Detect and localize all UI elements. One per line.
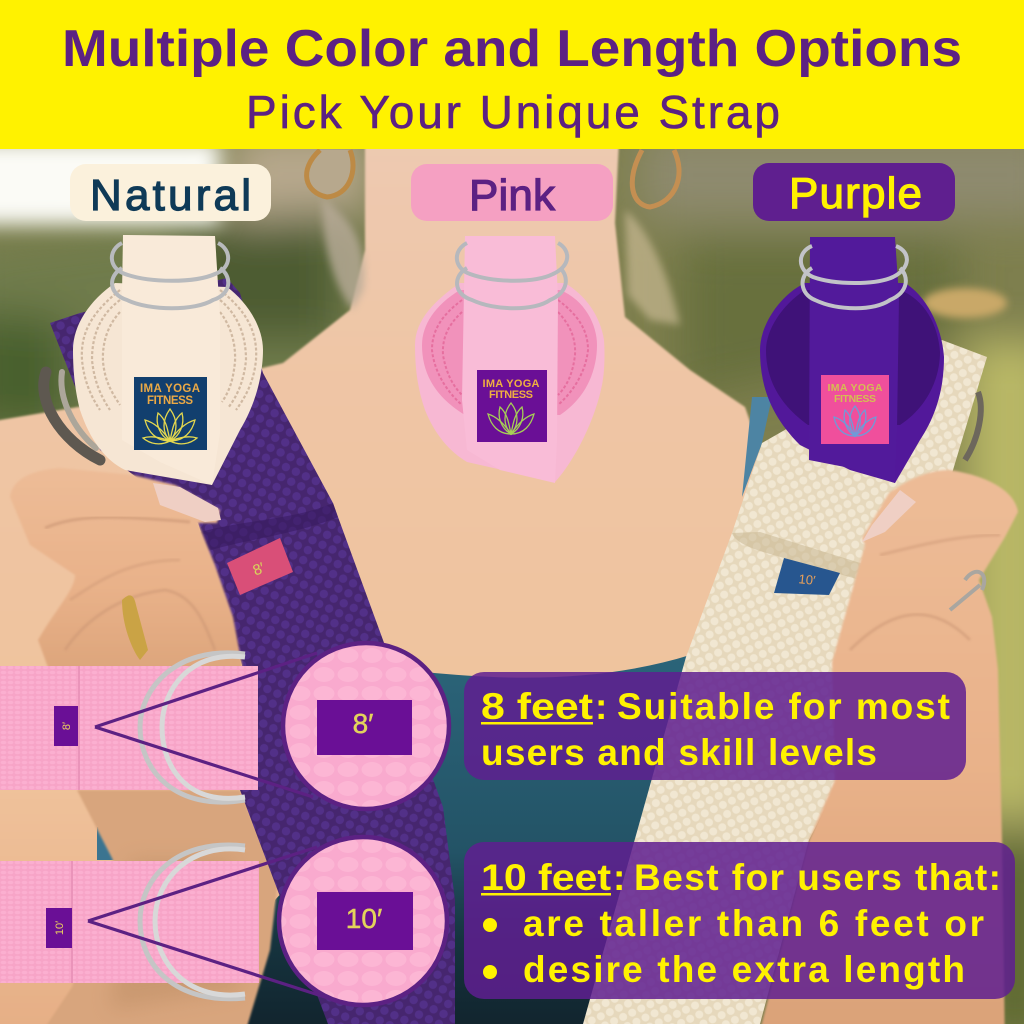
- callout: 8 feet: :: [595, 686, 607, 727]
- callout: 8 feet: Suitable for most: [617, 686, 950, 727]
- 10 foot zoom circle: 10′: [346, 903, 382, 934]
- 10 foot pink strap inset: [0, 845, 259, 999]
- label: lotus badge: IMA YOGA: [828, 382, 883, 394]
- purple yoga strap with 8 foot tag: [50, 278, 455, 1024]
- tag: 8 foot pink label: [227, 538, 293, 595]
- tank top: [97, 397, 772, 1024]
- product: purple strap roll: [760, 237, 944, 483]
- product: pink strap roll: [415, 236, 604, 483]
- label: Natural: Natural: [90, 171, 251, 220]
- label: lotus badge: [477, 370, 547, 442]
- 10 foot pink strap inset: 10′: [54, 921, 66, 935]
- label: lotus badge: [821, 375, 889, 444]
- hair and earrings: [307, 150, 680, 325]
- label: Pink: [411, 164, 613, 221]
- label: lotus badge: FITNESS: [489, 389, 533, 401]
- label: Natural: [70, 164, 271, 221]
- 8 foot pink strap inset: 8′: [61, 722, 73, 730]
- callout: 10 feet: [464, 842, 1015, 999]
- label: lotus badge: [134, 377, 207, 450]
- gold ring: [122, 595, 148, 660]
- title: Multiple Color and Length Options: [62, 20, 962, 78]
- label: lotus badge: IMA YOGA: [482, 378, 540, 390]
- 8 foot pink strap inset: [0, 653, 258, 802]
- banner: [0, 0, 1024, 149]
- forearm below left hand: [30, 790, 278, 1024]
- 8 foot zoom lines: [95, 653, 317, 797]
- color option: Purple: [753, 163, 955, 483]
- label: Pink: Pink: [469, 171, 556, 220]
- label: lotus badge: IMA YOGA: [140, 383, 200, 395]
- left hand holding strap: [10, 468, 245, 700]
- product: natural strap roll: [73, 235, 263, 485]
- tag: 10 foot navy label: 10′: [798, 571, 817, 588]
- subtitle: Pick Your Unique Strap: [246, 86, 780, 138]
- color option: Pink: [411, 164, 613, 483]
- color option: Natural: [70, 164, 271, 485]
- callout: 8 feet: [464, 672, 966, 780]
- label: Purple: [753, 163, 955, 221]
- 8 foot zoom circle: 8′: [353, 708, 373, 739]
- 8 foot zoom circle: [283, 643, 449, 809]
- callout: 10 feet: Best for users that:: [634, 857, 1001, 898]
- 10 foot zoom lines: [88, 847, 328, 998]
- callout: 10 feet: :: [613, 857, 625, 898]
- callout: 10 feet: 10 feet: [481, 857, 611, 898]
- callout: 10 feet: are taller than 6 feet or: [523, 903, 984, 944]
- tag: 10 foot navy label: [774, 558, 840, 595]
- tag: 8 foot pink label: 8′: [250, 559, 267, 580]
- strap D-ring behind natural roll: [44, 372, 100, 460]
- label: lotus badge: FITNESS: [834, 393, 876, 405]
- callout: 10 feet: desire the extra length: [523, 949, 965, 990]
- right hand holding strap: [755, 470, 1018, 1024]
- label: lotus badge: FITNESS: [147, 395, 193, 407]
- callout: 8 feet: users and skill levels: [481, 732, 877, 773]
- 10 foot zoom circle: [279, 837, 447, 1005]
- model: neck, chest and shoulders: [0, 120, 760, 1024]
- callout: 8 feet: 8 feet: [481, 686, 593, 727]
- cream yoga strap with 10 foot tag: [583, 340, 987, 1024]
- fingernail: [153, 483, 221, 522]
- label: Purple: Purple: [789, 169, 922, 218]
